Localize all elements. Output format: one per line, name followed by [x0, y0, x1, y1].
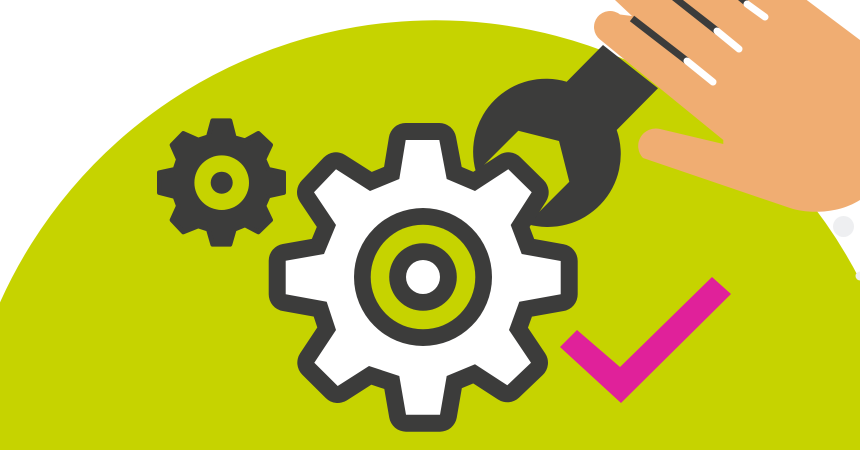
icon: large gear [286, 140, 561, 415]
icon: wrench [473, 45, 658, 227]
icon: pink check mark [560, 277, 731, 403]
finger gaps [632, 0, 765, 82]
icon: hand holding wrench [594, 0, 860, 212]
decorative pale dots [833, 216, 860, 280]
icon: small gear [159, 121, 284, 244]
